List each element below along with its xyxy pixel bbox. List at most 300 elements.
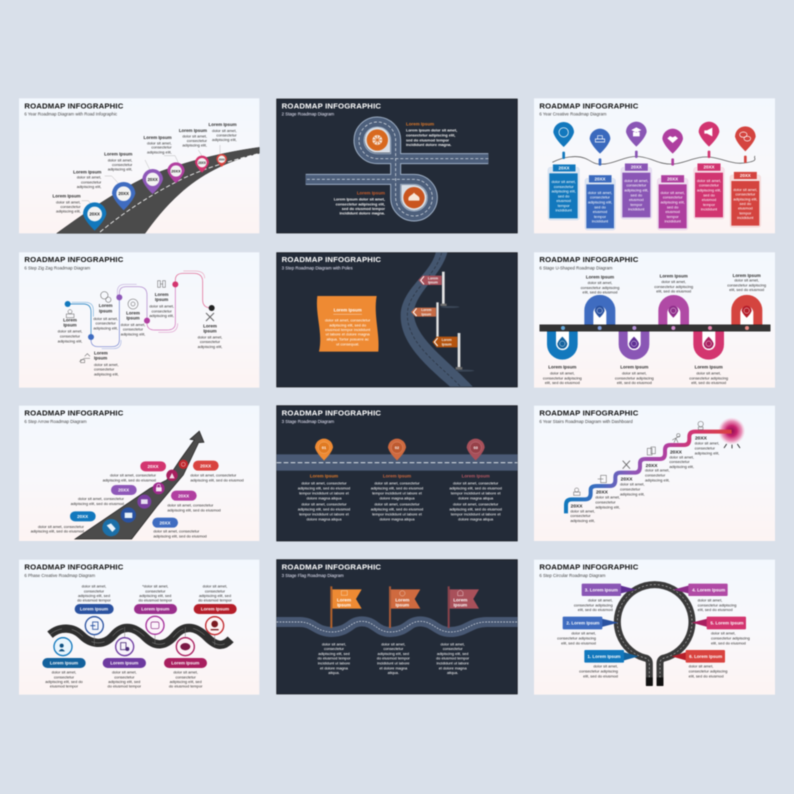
flag text 1: do eiusmod tempor bbox=[317, 657, 351, 661]
step labels: Lorem bbox=[203, 323, 217, 328]
subtitle: 6 Step Arrow Roadmap Diagram bbox=[24, 419, 87, 424]
step text: elit, sed do eiusmod bbox=[698, 607, 733, 612]
phase text: consectetur bbox=[84, 588, 105, 593]
card 2: incididunt bbox=[592, 220, 609, 224]
flag text 3 bbox=[436, 642, 470, 675]
year pins: 20XX bbox=[118, 191, 129, 196]
orange banner bbox=[317, 296, 379, 352]
year labels: 20XX bbox=[596, 489, 609, 495]
icons bbox=[574, 421, 703, 495]
icon: hand bbox=[79, 354, 90, 363]
phase text bbox=[45, 583, 232, 689]
step text: dolor sit amet, consectetur bbox=[190, 473, 237, 478]
stage two text: Lorem Ipsum bbox=[357, 191, 385, 196]
flag text 3: incididunt ut labore bbox=[436, 661, 469, 665]
card 4: adipiscing elit, bbox=[661, 201, 685, 205]
subtitle: 6 Year Creative Roadmap Diagram bbox=[539, 112, 607, 117]
stage labels: Lorem Ipsum bbox=[660, 273, 688, 278]
step callouts: 1. Lorem Ipsum bbox=[587, 654, 621, 659]
step labels: consectetur bbox=[81, 179, 102, 184]
card 1: incididunt bbox=[556, 209, 573, 213]
phase pills: Lorem Ipsum bbox=[141, 607, 169, 612]
card 1: eiusmod bbox=[556, 199, 571, 203]
stage labels: dolor sit amet, bbox=[550, 370, 575, 375]
flag text 2: aliqua. bbox=[388, 671, 399, 675]
year labels: dolor sit amet, bbox=[669, 454, 694, 459]
year pins: 20XX bbox=[171, 169, 181, 173]
panel: two stage loop road bbox=[277, 99, 517, 233]
card 2: eiusmod bbox=[593, 210, 607, 214]
phase circles bbox=[54, 616, 224, 656]
stage labels: dolor sit amet, bbox=[696, 370, 721, 375]
step labels: consectetur bbox=[96, 321, 116, 326]
step text: adipiscing elit, sed do eiusmod bbox=[190, 477, 244, 482]
step text: dolor sit amet, bbox=[711, 631, 736, 636]
stage one text: Lorem Ipsum bbox=[406, 121, 434, 126]
step text: dolor sit amet, bbox=[689, 664, 713, 669]
stage one text: tempor incididunt ut labore et bbox=[299, 491, 350, 495]
heading: ROADMAP INFOGRAPHIC bbox=[282, 101, 381, 110]
step text: dolor sit amet, bbox=[698, 598, 722, 603]
card 5 bbox=[694, 163, 724, 219]
panel: road with poles bbox=[277, 253, 517, 387]
flag text 2: dolor sit amet, bbox=[381, 642, 405, 646]
stage one text: adipiscing elit, sed do eiusmod bbox=[298, 508, 350, 512]
stage labels: elit, sed do eiusmod bbox=[617, 380, 652, 385]
card 2: tempor bbox=[594, 215, 607, 219]
step text: dolor sit amet, bbox=[571, 631, 596, 636]
step labels: dolor sit amet, bbox=[182, 134, 207, 139]
card 6: incididunt bbox=[737, 216, 754, 220]
year labels: adipiscing elit, bbox=[595, 504, 620, 509]
stage two badge bbox=[401, 185, 427, 210]
stage two text bbox=[371, 473, 423, 521]
panel: stairs roadmap bbox=[534, 406, 775, 541]
card 5: sed do bbox=[703, 193, 715, 197]
flag 1: Lorem bbox=[337, 597, 351, 602]
icon: signpost bbox=[158, 281, 165, 287]
year labels: adipiscing elit, bbox=[570, 518, 595, 523]
card 6: consectetur bbox=[735, 193, 756, 197]
stage labels: Lorem Ipsum bbox=[620, 365, 648, 370]
stage one badge bbox=[365, 127, 390, 153]
step labels: Lorem Ipsum bbox=[143, 135, 172, 140]
heading: ROADMAP INFOGRAPHIC bbox=[24, 101, 124, 110]
stage two text: tempor incididunt ut labore et bbox=[372, 491, 423, 495]
stage labels: dolor sit amet, bbox=[661, 279, 686, 284]
phase text: consectetur bbox=[114, 674, 135, 679]
flag 1: Ipsum bbox=[337, 603, 351, 608]
step text bbox=[31, 473, 244, 539]
card 5: adipiscing elit, bbox=[697, 189, 721, 193]
stage three text: dolor sit amet, consectetur bbox=[453, 503, 499, 507]
panel: road infographic bbox=[19, 98, 259, 233]
pole sign 2: Lorem bbox=[421, 308, 431, 312]
phase text: adipiscing elit, sed bbox=[108, 679, 140, 684]
dashboard glow bbox=[718, 418, 745, 444]
heading: ROADMAP INFOGRAPHIC bbox=[539, 409, 639, 418]
pole sign 1: Ipsum bbox=[428, 280, 438, 284]
step labels: adipiscing elit, bbox=[149, 313, 174, 318]
step labels: consectetur bbox=[112, 162, 133, 167]
card 3: consectetur bbox=[626, 184, 647, 188]
step text: adipiscing elit, sed do eiusmod bbox=[167, 507, 221, 512]
phase text: adipiscing elit, sed bbox=[78, 593, 110, 598]
flag text 3: aliqua. bbox=[447, 671, 458, 675]
step text: adipiscing elit, sed do eiusmod bbox=[71, 501, 124, 506]
year labels: consectetur bbox=[645, 472, 666, 477]
card 2: consectetur bbox=[590, 196, 611, 200]
step labels: Lorem Ipsum bbox=[179, 128, 207, 133]
card 4: incididunt bbox=[665, 220, 682, 224]
stage two text bbox=[334, 191, 386, 216]
step labels: Ipsum bbox=[126, 316, 140, 321]
subtitle: 3 Stage Roadmap Diagram bbox=[282, 419, 335, 424]
card 6: 20XX bbox=[740, 173, 751, 178]
card 6: eiusmod bbox=[738, 207, 753, 211]
subtitle: 6 Step Zig Zag Roadmap Diagram bbox=[24, 265, 91, 270]
flag 3 bbox=[448, 586, 479, 628]
stage labels: consectetur adipiscing bbox=[615, 375, 654, 380]
subtitle: 6 Stage U-Shaped Roadmap Diagram bbox=[539, 265, 613, 270]
step labels: dolor sit amet, bbox=[108, 157, 132, 162]
card 4: eiusmod bbox=[665, 210, 680, 214]
orange banner: adipiscing elit, sed do bbox=[329, 323, 366, 327]
flag text 2: consectetur bbox=[383, 647, 404, 651]
year pills: 20XX bbox=[178, 493, 189, 498]
stage labels: consectetur adipiscing bbox=[654, 284, 693, 289]
step text: dolor sit amet, consectetur bbox=[38, 524, 85, 529]
pole sign 3: Lorem bbox=[442, 338, 452, 342]
stage labels: elit, sed do eiusmod bbox=[545, 380, 580, 385]
card 3: adipiscing elit, bbox=[624, 189, 648, 193]
phase text: do eiusmod tempor bbox=[198, 598, 232, 603]
orange banner: ut consequat. bbox=[336, 342, 359, 346]
phase text: consectetur bbox=[145, 588, 166, 593]
step callouts: 4. Lorem Ipsum bbox=[692, 588, 725, 593]
step text: dolor sit amet, consectetur bbox=[153, 529, 200, 534]
step labels: dolor sit amet, bbox=[212, 128, 237, 133]
stage one text: dolore magna aliqua bbox=[307, 496, 342, 500]
year labels: consectetur bbox=[695, 445, 716, 450]
step text: adipiscing elit, sed do eiusmod bbox=[153, 534, 207, 539]
year pills: 20XX bbox=[77, 514, 88, 519]
year labels: adipiscing elit, bbox=[645, 477, 670, 482]
card 1: sed do bbox=[558, 194, 569, 198]
year labels: consectetur bbox=[570, 513, 591, 518]
step labels: Ipsum bbox=[99, 308, 112, 313]
phase icons bbox=[59, 621, 219, 651]
step labels: adipiscing elit, bbox=[121, 331, 145, 336]
stage three text: dolore magna aliqua bbox=[458, 496, 494, 500]
step labels: dolor sit amet, bbox=[93, 316, 118, 321]
step text: consectetur adipiscing bbox=[557, 635, 596, 640]
flag text 3: dolor sit amet, bbox=[441, 642, 465, 646]
stage labels: Lorem Ipsum bbox=[548, 365, 576, 370]
card 6: dolor sit amet, bbox=[733, 188, 757, 192]
step labels: consectetur bbox=[216, 132, 237, 137]
step callouts bbox=[563, 584, 746, 663]
heading: ROADMAP INFOGRAPHIC bbox=[282, 255, 381, 264]
year pills: 20XX bbox=[200, 463, 211, 468]
stage one text: consectetur adipiscing elit, bbox=[406, 133, 455, 137]
stage labels bbox=[543, 273, 766, 385]
step labels: consectetur bbox=[60, 204, 81, 209]
step circles bbox=[102, 460, 188, 536]
orange banner: ut labore et dolore magna bbox=[326, 333, 371, 337]
step labels: adipiscing elit, bbox=[212, 137, 237, 142]
step labels: Ipsum bbox=[203, 328, 217, 333]
stage one text: dolor sit amet, consectetur bbox=[301, 503, 347, 507]
heading: ROADMAP INFOGRAPHIC bbox=[24, 409, 124, 418]
step labels: consectetur bbox=[187, 138, 208, 143]
step labels: adipiscing elit, bbox=[77, 184, 101, 189]
pole sign 3 bbox=[432, 333, 474, 372]
card 3: sed do bbox=[631, 193, 642, 197]
circular road bbox=[617, 585, 692, 686]
year pills bbox=[70, 461, 219, 528]
stage three text bbox=[449, 473, 502, 521]
stage two text: consectetur adipiscing elit, bbox=[336, 202, 385, 206]
orange banner: aliqua. Tortor posuere ac bbox=[326, 338, 369, 342]
step labels: adipiscing elit, bbox=[182, 143, 207, 148]
step labels: consectetur bbox=[152, 308, 172, 313]
card 3: tempor bbox=[630, 203, 643, 207]
pole sign 1 bbox=[418, 272, 459, 308]
stage two text: dolore magna aliqua bbox=[380, 517, 415, 521]
step labels: dolor sit amet, bbox=[94, 362, 119, 367]
pole sign 2 bbox=[411, 302, 439, 337]
card 5: incididunt bbox=[701, 208, 718, 212]
card 6 bbox=[730, 172, 761, 227]
step labels: Ipsum bbox=[63, 323, 77, 328]
step text: dolor sit amet, bbox=[588, 598, 613, 603]
year labels: dolor sit amet, bbox=[570, 508, 595, 513]
stage labels: elit, sed do eiusmod bbox=[583, 290, 617, 295]
stage labels: consectetur adipiscing bbox=[543, 375, 582, 380]
flag 3: Ipsum bbox=[453, 603, 467, 608]
card 2: 20XX bbox=[595, 176, 605, 181]
card 1 bbox=[548, 164, 579, 220]
pole sign 3: Ipsum bbox=[442, 342, 452, 346]
step callouts: 2. Lorem Ipsum bbox=[566, 621, 600, 626]
flag 1 bbox=[330, 586, 362, 628]
card 5: eiusmod bbox=[702, 198, 716, 202]
phase text: dolor sit amet, bbox=[203, 583, 227, 588]
step labels bbox=[58, 292, 222, 377]
step labels: consectetur bbox=[200, 339, 221, 344]
stage one text bbox=[298, 473, 350, 521]
stage labels: elit, sed do eiusmod bbox=[729, 287, 764, 292]
step labels: Ipsum bbox=[94, 356, 107, 361]
flag text 2: adipiscing elit, sed bbox=[378, 652, 409, 656]
panel: creative roadmap pins and cards bbox=[534, 98, 775, 233]
stage pins bbox=[315, 439, 485, 460]
phase text: consectetur bbox=[205, 588, 226, 593]
stage one text: sed do eiusmod tempor bbox=[406, 138, 450, 142]
stage labels: dolor sit amet, bbox=[588, 280, 612, 285]
flag 2 bbox=[389, 586, 420, 628]
phase text: adipiscing elit, sed bbox=[199, 593, 231, 598]
step callouts: 3. Lorem Ipsum bbox=[585, 588, 618, 593]
stage three text: dolor sit amet, consectetur bbox=[453, 482, 499, 486]
flag text 1: adipiscing elit, sed bbox=[318, 652, 350, 656]
step text: elit, sed do eiusmod bbox=[561, 640, 596, 645]
stage three text: tempor incididunt ut labore et bbox=[451, 513, 501, 517]
card 4: sed do bbox=[667, 205, 678, 209]
flag text 1: incididunt ut labore bbox=[318, 661, 350, 665]
year labels: dolor sit amet, bbox=[645, 468, 670, 473]
card 3: 20XX bbox=[631, 165, 642, 170]
card 1: tempor bbox=[558, 204, 570, 208]
step text bbox=[557, 598, 750, 678]
phase text: dolor sit amet, bbox=[52, 670, 76, 675]
step text: dolor sit amet, consectetur bbox=[78, 496, 125, 501]
step text: consectetur adipiscing bbox=[579, 668, 618, 673]
dashboard ticks bbox=[724, 444, 740, 448]
stage one text: Lorem Ipsum dolor sit amet, bbox=[406, 129, 457, 133]
stage labels: Lorem Ipsum bbox=[733, 273, 761, 278]
year labels: consectetur bbox=[669, 459, 690, 464]
icon: tools bbox=[206, 313, 214, 321]
step text: adipiscing elit, sed do eiusmod bbox=[31, 529, 84, 534]
step callouts: 6. Lorem Ipsum bbox=[689, 654, 722, 659]
step labels: consectetur bbox=[151, 145, 172, 150]
heading: ROADMAP INFOGRAPHIC bbox=[539, 101, 639, 110]
step text: elit, sed do eiusmod bbox=[578, 607, 613, 612]
stage one text: dolor sit amet, consectetur bbox=[301, 482, 347, 486]
step text: elit, sed do eiusmod bbox=[689, 673, 724, 678]
heading: ROADMAP INFOGRAPHIC bbox=[24, 563, 124, 572]
stage one text: dolore magna aliqua bbox=[307, 517, 342, 521]
step labels: Lorem bbox=[63, 317, 77, 322]
panel: zig zag roadmap bbox=[19, 252, 259, 388]
stage two text: Lorem Ipsum bbox=[383, 473, 411, 478]
card 1: 20XX bbox=[559, 166, 569, 171]
step labels: Lorem bbox=[155, 292, 169, 297]
phase pills: Lorem Ipsum bbox=[80, 607, 108, 612]
flag text 2: do eiusmod tempor bbox=[377, 657, 411, 661]
subtitle: 6 Year Stairs Roadmap Diagram with Dashboard bbox=[539, 419, 633, 424]
arrow road bbox=[75, 431, 204, 539]
step labels: adipiscing elit, bbox=[108, 167, 132, 172]
step labels: dolor sit amet, bbox=[77, 175, 101, 180]
subtitle: 3 Step Roadmap Diagram with Poles bbox=[282, 265, 353, 270]
card 5: tempor bbox=[703, 203, 716, 207]
phase text: adipiscing elit, sed do bbox=[45, 679, 84, 684]
year labels: consectetur bbox=[595, 499, 616, 504]
stage pins: 03 bbox=[473, 445, 479, 450]
step labels: dolor sit amet, bbox=[58, 329, 82, 334]
curved road bbox=[401, 253, 473, 387]
card 5: 20XX bbox=[704, 165, 714, 170]
year pins: 20XX bbox=[148, 177, 158, 182]
stage two text: tempor incididunt ut labore et bbox=[372, 513, 423, 517]
year pills: 20XX bbox=[148, 464, 158, 469]
step labels: dolor sit amet, bbox=[56, 199, 81, 204]
stage one text: tempor incididunt ut labore et bbox=[299, 513, 350, 517]
step labels: Lorem bbox=[99, 303, 113, 308]
flag text 2 bbox=[377, 642, 411, 675]
step labels: Lorem Ipsum bbox=[52, 194, 81, 199]
card 4: dolor sit amet, bbox=[661, 191, 685, 195]
step text: consectetur adipiscing bbox=[574, 602, 613, 607]
subtitle: 6 Year Roadmap Diagram with Road Infographic bbox=[24, 112, 118, 117]
lower u shapes bbox=[547, 331, 724, 360]
flag text 3: adipiscing elit, sed bbox=[437, 652, 468, 656]
year pills: 20XX bbox=[160, 520, 170, 525]
flag text 2: et dolore magna bbox=[379, 666, 408, 670]
stage one text: adipiscing elit, sed do eiusmod bbox=[298, 487, 350, 491]
zig zag path bbox=[68, 271, 212, 349]
stage three text: adipiscing elit, sed do eiusmod bbox=[449, 487, 502, 491]
stage labels: consectetur adipiscing bbox=[581, 285, 619, 290]
step text: consectetur adipiscing bbox=[689, 668, 727, 673]
flag text 1: et dolore magna bbox=[320, 666, 349, 670]
panel: flag roadmap bbox=[277, 560, 517, 694]
year pills: 20XX bbox=[118, 488, 129, 493]
flag 3: Lorem bbox=[453, 597, 467, 602]
year labels: 20XX bbox=[670, 450, 683, 456]
card 1: consectetur bbox=[554, 185, 574, 189]
step text: dolor sit amet, consectetur bbox=[167, 503, 214, 508]
step text: adipiscing elit, sed do eiusmod bbox=[103, 477, 156, 482]
card 1: adipiscing elit, bbox=[552, 190, 576, 194]
phase text: *dolor sit amet, bbox=[142, 583, 168, 588]
orange banner: dolor sit amet, consectetur bbox=[325, 319, 371, 323]
panel: circular roadmap bbox=[534, 560, 775, 695]
stage pins: 01 bbox=[322, 445, 327, 450]
card 3: incididunt bbox=[628, 208, 645, 212]
heading: ROADMAP INFOGRAPHIC bbox=[539, 563, 639, 572]
step labels: adipiscing elit, bbox=[198, 344, 222, 349]
step text: dolor sit amet, bbox=[593, 664, 618, 669]
phase text: adipiscing elit, sed bbox=[170, 679, 202, 684]
flag text 3: et dolore magna bbox=[439, 666, 467, 670]
flag text 3: do eiusmod tempor bbox=[436, 657, 470, 661]
heading: ROADMAP INFOGRAPHIC bbox=[282, 563, 381, 572]
card 3 bbox=[621, 163, 652, 219]
step labels: adipiscing elit, bbox=[93, 325, 118, 330]
stage three text: dolore magna aliqua bbox=[458, 517, 494, 521]
card 4 bbox=[657, 175, 688, 230]
year labels: adipiscing elit, bbox=[695, 450, 719, 455]
stage two text: incididunt dolore magna. bbox=[339, 212, 385, 216]
step labels: dolor sit amet, bbox=[121, 322, 145, 327]
stage one text: incididunt dolore magna. bbox=[406, 143, 452, 147]
step dots bbox=[65, 281, 215, 340]
subtitle: 2 Stage Roadmap Diagram bbox=[282, 112, 335, 117]
year labels: 20XX bbox=[571, 503, 583, 509]
stage pins: 02 bbox=[395, 445, 400, 450]
flag 2: Ipsum bbox=[395, 603, 409, 608]
step labels: consectetur bbox=[60, 333, 81, 338]
step text: consectetur adipiscing bbox=[711, 635, 750, 640]
wave road bbox=[50, 628, 231, 645]
card 5: dolor sit amet, bbox=[697, 179, 721, 183]
card 1: dolor sit amet, bbox=[552, 180, 576, 184]
stage two text: sed do eiusmod tempor bbox=[342, 207, 386, 211]
phase text: do eiusmod tempor bbox=[77, 598, 111, 603]
road bbox=[57, 147, 259, 233]
step labels: adipiscing elit, bbox=[56, 209, 81, 214]
stage two text: dolor sit amet, consectetur bbox=[374, 503, 420, 507]
card 2: sed do bbox=[594, 205, 606, 209]
year pins: 20XX bbox=[89, 211, 100, 216]
step labels bbox=[52, 122, 237, 214]
flag text 1 bbox=[317, 642, 351, 675]
step text: elit, sed do eiusmod bbox=[583, 673, 618, 678]
